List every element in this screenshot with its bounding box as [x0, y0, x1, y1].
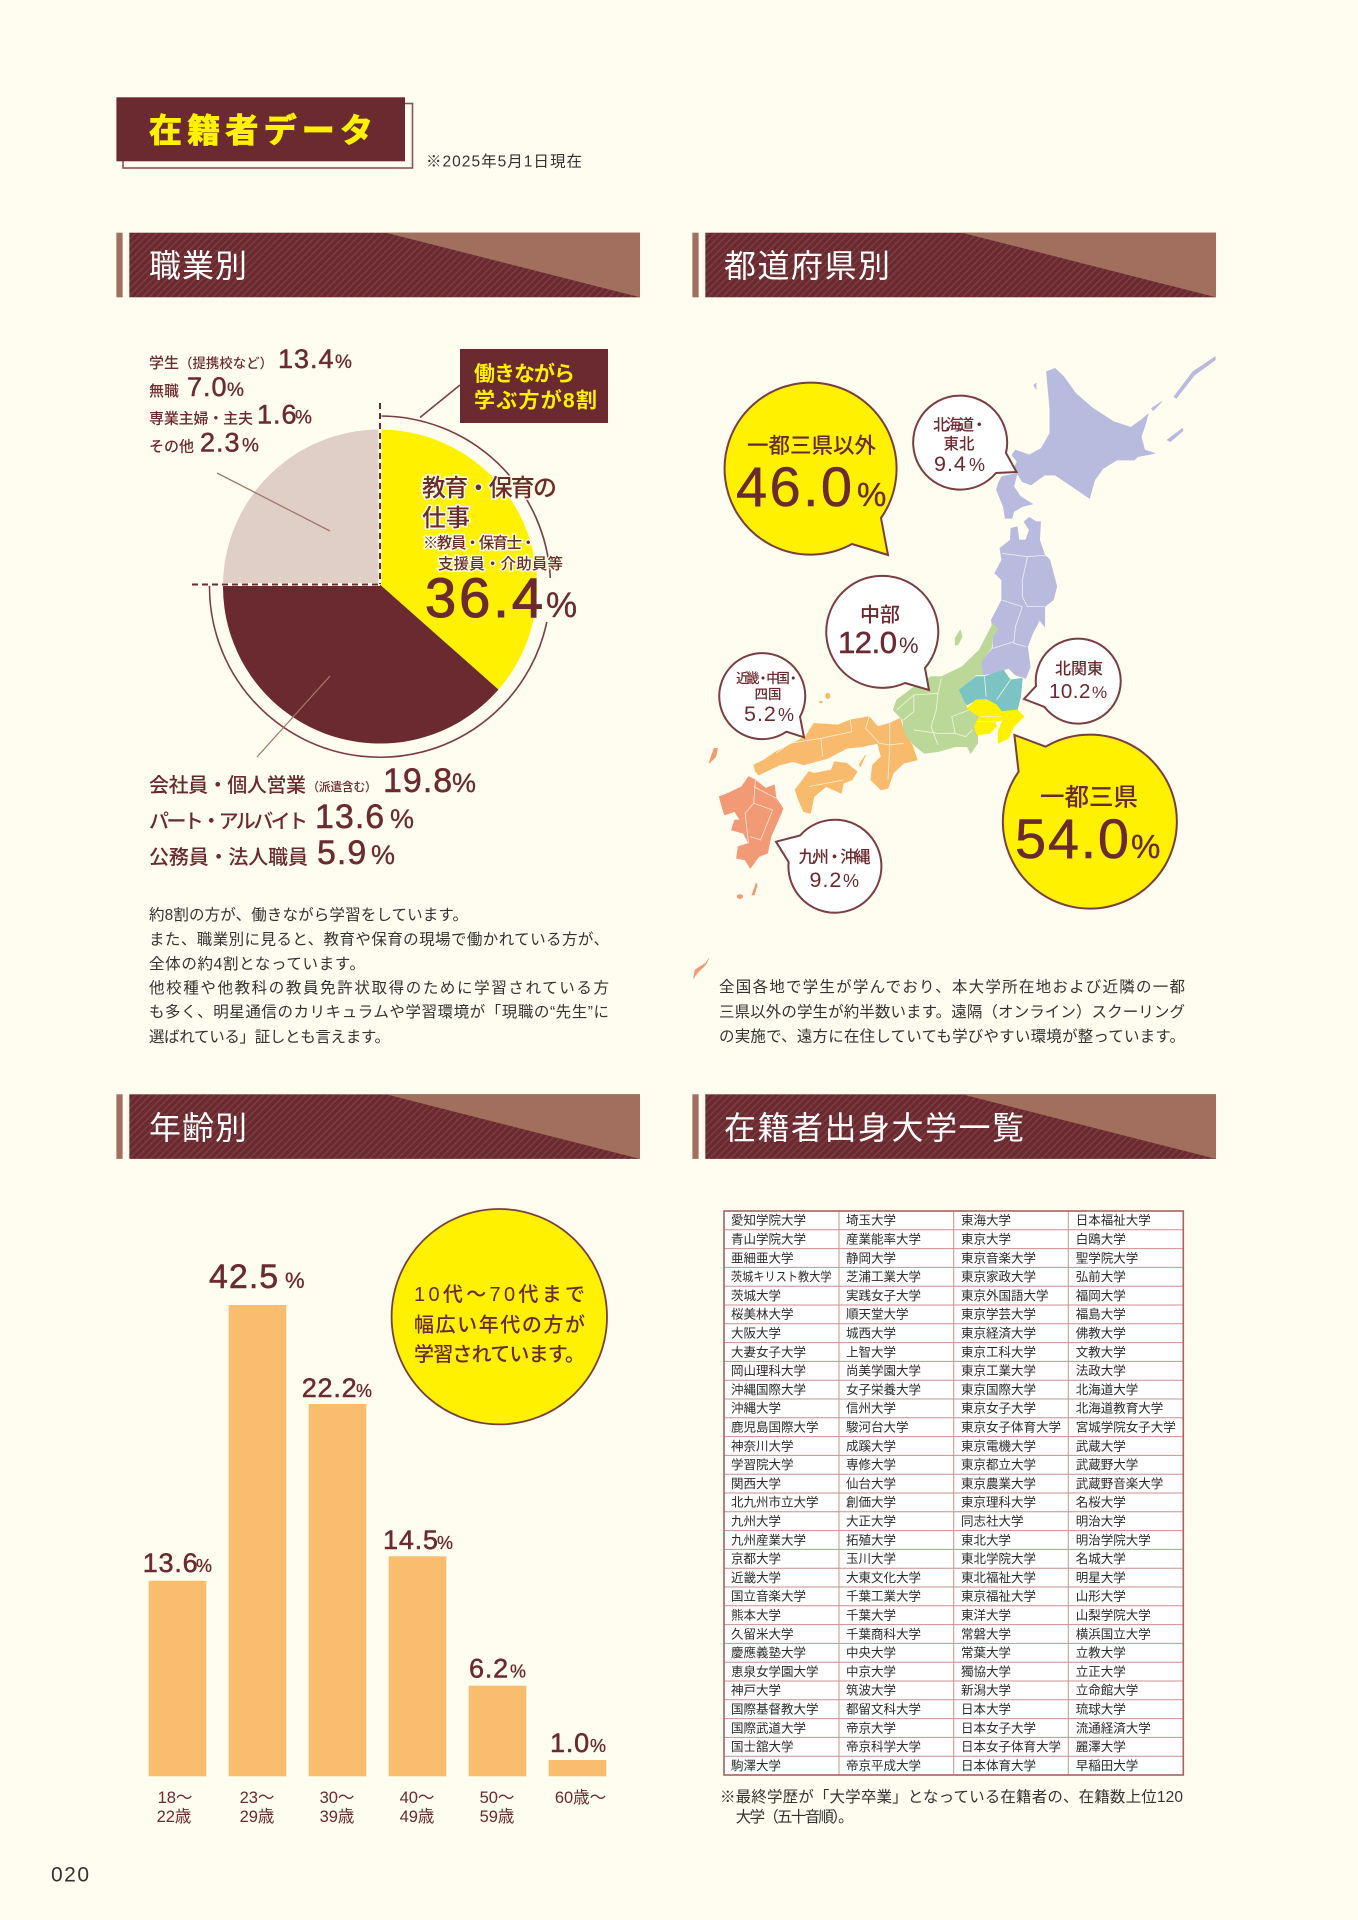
- table column 2: 都留文科大学: [846, 1701, 921, 1716]
- legend: bottom-left labels: 会社員・個人営業: [149, 774, 306, 797]
- table column 1: 国士舘大学: [731, 1739, 794, 1754]
- table column 1: 青山学院大学: [731, 1231, 806, 1246]
- legend: top-left labels: 1.6: [257, 400, 298, 430]
- bubble: 北海道・東北 9.4%: 9.4: [934, 452, 967, 476]
- bubble: 近畿・中国・四国 5.2%: 四国: [754, 687, 782, 702]
- outer arc: working students: [209, 416, 550, 757]
- table footnote: [720, 1788, 1183, 1826]
- slice: education, yellow: [380, 430, 537, 690]
- bar: 23-29 42.5%: %: [285, 1268, 305, 1293]
- section header: 職業別: [116, 233, 640, 297]
- legend: bottom-left labels: %: [371, 840, 395, 870]
- table column 4: 立命館大学: [1076, 1683, 1138, 1698]
- table column 3: 東北福祉大学: [961, 1570, 1036, 1585]
- bar: 23-29 42.5%: 42.5: [209, 1258, 279, 1296]
- bubble: 近畿・中国・四国 5.2%: 近畿・中国・: [736, 671, 800, 686]
- table column 1: 国立音楽大学: [731, 1589, 806, 1604]
- legend: top-left labels: 無職: [149, 383, 179, 400]
- bar: 40-49 14.5%: %: [437, 1533, 453, 1553]
- bar: 18-22 13.6%: 22歳: [157, 1807, 191, 1826]
- table column 2: 帝京科学大学: [846, 1739, 921, 1754]
- table column 2: 中京大学: [846, 1664, 896, 1679]
- table column 1: 沖縄大学: [731, 1401, 781, 1416]
- callout: 働きながら学ぶ方が8割: [420, 349, 608, 423]
- bubble: 北海道・東北 9.4%: 北海道・: [933, 416, 987, 434]
- table column 2: 創価大学: [846, 1495, 896, 1510]
- pie label: education 36.4%: 教育・保育の: [422, 475, 557, 502]
- table column 3: 新潟大学: [961, 1683, 1011, 1698]
- bubble: 九州・沖縄 9.2%: 9.2: [810, 868, 842, 892]
- table column 3: 日本体育大学: [961, 1758, 1036, 1773]
- legend: top-left labels: 7.0: [187, 372, 228, 402]
- legend: top-left labels: 学生（提携校など）: [149, 355, 273, 372]
- table column 3: 常磐大学: [961, 1626, 1011, 1641]
- pie label: education 36.4%: 仕事: [422, 505, 470, 532]
- table column 3: 東海大学: [961, 1213, 1011, 1228]
- table column 3: 東北大学: [961, 1532, 1011, 1547]
- bar: 40-49 14.5%: 14.5: [383, 1525, 439, 1555]
- bar: 30-39 22.2%: 30〜: [320, 1789, 354, 1807]
- table column 1: 近畿大学: [731, 1570, 781, 1585]
- table column 2: 実践女子大学: [846, 1288, 921, 1303]
- table column 2: 上智大学: [846, 1344, 896, 1359]
- text block: occupation commentary: 約8割の方が、働きながら学習をしています。: [149, 906, 468, 924]
- bubble: 一都三県以外 46.0%: 46.0: [736, 455, 852, 518]
- table column 2: 尚美学園大学: [846, 1363, 921, 1378]
- table column 3: 東京電機大学: [961, 1438, 1036, 1453]
- slice: working, dark: [223, 584, 498, 744]
- callout: 10代〜70代まで: 幅広い年代の方が: [414, 1314, 585, 1336]
- legend: bottom-left labels: 公務員・法人職員: [149, 846, 308, 869]
- table column 1: 九州産業大学: [731, 1532, 806, 1547]
- table column 1: 神奈川大学: [731, 1438, 794, 1453]
- table column 1: 茨城キリスト教大学: [731, 1269, 832, 1284]
- bubble: 中部 12.0%: %: [899, 633, 919, 658]
- pie label: education 36.4%: 36.4: [425, 566, 543, 629]
- table column 4: 武蔵野音楽大学: [1076, 1476, 1163, 1491]
- legend: bottom-left labels: 5.9: [317, 834, 367, 872]
- legend: bottom-left labels: 19.8: [383, 762, 453, 800]
- bubble: 一都三県 54.0%: %: [1131, 828, 1160, 865]
- bar: 40-49 14.5%: 49歳: [400, 1807, 434, 1826]
- table column 1: 桜美林大学: [731, 1307, 794, 1322]
- table column 4: 名城大学: [1076, 1551, 1126, 1566]
- table column 1: 国際基督教大学: [731, 1701, 819, 1716]
- table column 3: 東京女子大学: [961, 1401, 1036, 1416]
- table column 2: 信州大学: [846, 1401, 896, 1416]
- table column 1: 大妻女子大学: [731, 1344, 806, 1359]
- bubble: 一都三県 54.0%: 54.0: [1015, 807, 1129, 870]
- table column 3: 東京大学: [961, 1231, 1011, 1246]
- region: Kyushu and Okinawa: [693, 748, 783, 978]
- table grid: [724, 1211, 1183, 1775]
- table column 4: 法政大学: [1076, 1363, 1126, 1378]
- table column 4: 日本福祉大学: [1076, 1213, 1151, 1228]
- table column 2: [846, 1213, 921, 1773]
- callout: 10代〜70代まで: [392, 1209, 607, 1424]
- slice: other, light: [223, 430, 380, 584]
- text block: prefecture commentary: の実施で、遠方に在住していても学びやすい環境が整っています。: [719, 1028, 1185, 1046]
- bubble: 中部 12.0%: [826, 576, 938, 690]
- bar: 23-29 42.5%: 29歳: [240, 1807, 274, 1826]
- bar: 30-39 22.2%: [302, 1373, 372, 1826]
- table column 4: 武蔵大学: [1076, 1438, 1126, 1453]
- pie label: education 36.4%: [422, 475, 577, 629]
- table column 4: [1076, 1213, 1176, 1773]
- section header: 都道府県別: 都道府県別: [724, 248, 890, 284]
- table column 4: 名桜大学: [1076, 1495, 1126, 1510]
- bubble: 北関東 10.2%: 10.2: [1049, 680, 1091, 703]
- legend: bottom-left labels: 13.6: [315, 798, 385, 836]
- legend: bottom-left labels: %: [390, 804, 414, 834]
- table column 2: 仙台大学: [846, 1476, 896, 1491]
- table column 3: 獨協大学: [961, 1664, 1011, 1679]
- table column 4: 早稲田大学: [1076, 1758, 1138, 1773]
- bubble: 北関東 10.2%: 北関東: [1055, 660, 1103, 678]
- region: Kita-Kanto: [959, 670, 1022, 712]
- table column 3: 東京女子体育大学: [961, 1419, 1061, 1434]
- legend: top-left labels: 13.4: [278, 344, 335, 374]
- table column 1: 慶應義塾大学: [731, 1645, 806, 1660]
- table column 1: 神戸大学: [731, 1683, 781, 1698]
- bubble: 九州・沖縄 9.2%: 九州・沖縄: [798, 848, 871, 867]
- text block: occupation commentary: 選ばれている」証しとも言えます。: [149, 1028, 390, 1046]
- table column 1: 国際武道大学: [731, 1720, 806, 1735]
- title: 在籍者データ: 在籍者データ: [149, 112, 373, 149]
- table column 3: 日本女子大学: [961, 1720, 1036, 1735]
- table column 3: 東京学芸大学: [961, 1307, 1036, 1322]
- legend: top-left labels: [149, 344, 352, 458]
- callout: 10代〜70代まで: 10代〜70代まで: [414, 1283, 585, 1306]
- bubble: 北海道・東北 9.4%: [913, 396, 1016, 490]
- table column 2: 成蹊大学: [846, 1438, 896, 1453]
- bubble: 中部 12.0%: 12.0: [838, 625, 897, 660]
- table column 1: 岡山理科大学: [731, 1363, 806, 1378]
- table column 1: 熊本大学: [731, 1607, 781, 1622]
- bar: 30-39 22.2%: %: [356, 1381, 372, 1401]
- table column 2: 駿河台大学: [846, 1419, 909, 1434]
- table column 4: 北海道大学: [1076, 1382, 1138, 1397]
- legend: top-left labels: 専業主婦・主夫: [149, 410, 253, 428]
- bubble: 近畿・中国・四国 5.2%: [719, 653, 805, 739]
- bar: 18-22 13.6%: 13.6: [143, 1548, 198, 1578]
- table column 3: 東京経済大学: [961, 1325, 1036, 1340]
- bar: 50-59 6.2%: %: [510, 1662, 526, 1682]
- table column 4: 文教大学: [1076, 1344, 1126, 1359]
- table column 4: 麗澤大学: [1076, 1739, 1126, 1754]
- table column 1: 恵泉女学園大学: [731, 1664, 819, 1679]
- pie chart: occupations: [192, 403, 550, 757]
- bar: 60+ 1.0%: %: [590, 1736, 606, 1756]
- legend: bottom-left labels: %: [452, 768, 476, 798]
- table column 3: 常葉大学: [961, 1645, 1011, 1660]
- table column 2: 大東文化大学: [846, 1570, 921, 1585]
- table footnote: ※最終学歴が「大学卒業」となっている在籍者の、在籍数上位120: [720, 1788, 1183, 1806]
- legend: top-left labels: その他: [149, 438, 194, 456]
- table column 3: 東洋大学: [961, 1607, 1011, 1622]
- bubble: 一都三県以外 46.0%: 一都三県以外: [747, 434, 876, 458]
- leader lines: [217, 473, 330, 757]
- table column 3: 東京都立大学: [961, 1457, 1036, 1472]
- title: 在籍者データ: [116, 97, 413, 168]
- bar chart: age groups: [143, 1258, 606, 1826]
- pie label: education 36.4%: %: [546, 586, 577, 625]
- section header: 年齢別: [116, 1094, 640, 1159]
- table column 2: 玉川大学: [846, 1551, 896, 1566]
- table column 3: 東京福祉大学: [961, 1589, 1036, 1604]
- legend: bottom-left labels: パート・アルバイト: [149, 810, 308, 833]
- table column 3: 東京国際大学: [961, 1382, 1036, 1397]
- table column 4: 武蔵野大学: [1076, 1457, 1138, 1472]
- table column 2: 産業能率大学: [846, 1231, 921, 1246]
- legend: bottom-left labels: [149, 762, 476, 872]
- bubble: 北関東 10.2%: %: [1092, 683, 1107, 702]
- bar: 50-59 6.2%: [469, 1654, 526, 1826]
- table column 4: 宮城学院女子大学: [1076, 1419, 1176, 1434]
- table column 1: 鹿児島国際大学: [731, 1419, 819, 1434]
- bar: 40-49 14.5%: 40〜: [400, 1789, 434, 1807]
- text block: occupation commentary: 全体の約4割となっています。: [149, 955, 365, 973]
- callout: 働きながら学ぶ方が8割: 学ぶ方が8割: [474, 388, 597, 412]
- callout: 10代〜70代まで: 学習されています。: [414, 1343, 585, 1366]
- table column 4: 明星大学: [1076, 1570, 1126, 1585]
- text block: occupation commentary: [149, 906, 609, 1046]
- table column 1: [731, 1213, 832, 1773]
- table column 3: 東京理科大学: [961, 1495, 1036, 1510]
- table column 4: 山梨学院大学: [1076, 1607, 1151, 1622]
- table column 1: 駒澤大学: [731, 1758, 781, 1773]
- bubble: 近畿・中国・四国 5.2%: %: [778, 705, 794, 725]
- legend: top-left labels: %: [335, 352, 352, 373]
- bar: 18-22 13.6%: %: [196, 1556, 212, 1576]
- text block: prefecture commentary: 全国各地で学生が学んでおり、本大学所在地および近隣の一都: [719, 978, 1185, 996]
- bar: 60+ 1.0%: 60歳〜: [555, 1788, 606, 1807]
- table column 3: 東京外国語大学: [961, 1288, 1049, 1303]
- table column 2: 順天堂大学: [846, 1307, 909, 1322]
- bubble: 一都三県 54.0%: 一都三県: [1040, 784, 1138, 812]
- dashed dividers: [192, 403, 380, 584]
- table column 3: 東京農業大学: [961, 1476, 1036, 1491]
- table column 1: 沖縄国際大学: [731, 1382, 806, 1397]
- bar: 30-39 22.2%: 39歳: [320, 1807, 354, 1826]
- table column 2: 拓殖大学: [846, 1532, 896, 1547]
- table column 2: 大正大学: [846, 1513, 896, 1528]
- bubble: 一都三県 54.0%: [1003, 735, 1177, 909]
- table column 4: 明治大学: [1076, 1513, 1126, 1528]
- table column 3: 日本女子体育大学: [961, 1739, 1061, 1754]
- table column 2: 筑波大学: [846, 1683, 896, 1698]
- table column 4: 立正大学: [1076, 1664, 1126, 1679]
- table column 2: 中央大学: [846, 1645, 896, 1660]
- bubble: 北関東 10.2%: [1024, 639, 1121, 724]
- table column 2: 芝浦工業大学: [846, 1269, 921, 1284]
- table column 4: 福岡大学: [1076, 1288, 1126, 1303]
- region: Tokyo area: [967, 699, 1024, 743]
- table column 4: 佛教大学: [1076, 1325, 1126, 1340]
- table column 3: 東京工業大学: [961, 1363, 1036, 1378]
- table column 4: 流通経済大学: [1076, 1720, 1151, 1735]
- bar: 30-39 22.2%: 22.2: [302, 1373, 357, 1403]
- table column 3: 東京家政大学: [961, 1269, 1036, 1284]
- bubble: 北海道・東北 9.4%: 東北: [943, 435, 975, 453]
- table column 1: 久留米大学: [731, 1626, 794, 1641]
- table column 4: 白鴎大学: [1076, 1231, 1126, 1246]
- table column 4: 立教大学: [1076, 1645, 1126, 1660]
- bar: 50-59 6.2%: 59歳: [480, 1807, 514, 1826]
- section header: 在籍者出身大学一覧: [692, 1094, 1216, 1159]
- table column 3: 東京工科大学: [961, 1344, 1036, 1359]
- table column 2: 城西大学: [846, 1325, 896, 1340]
- table column 4: 福島大学: [1076, 1307, 1126, 1322]
- date note: ※2025年5月1日現在: [426, 152, 582, 170]
- section header: 年齢別: 年齢別: [149, 1110, 247, 1146]
- table column 1: 大阪大学: [731, 1325, 781, 1340]
- table column 3: 東京音楽大学: [961, 1250, 1036, 1265]
- section header: 都道府県別: [692, 233, 1216, 297]
- bar: 50-59 6.2%: 6.2: [469, 1654, 509, 1684]
- table column 2: 静岡大学: [846, 1250, 896, 1265]
- table column 2: 専修大学: [846, 1457, 896, 1472]
- table column 1: 亜細亜大学: [731, 1250, 794, 1265]
- bubble: 一都三県以外 46.0%: %: [857, 476, 886, 513]
- bar: 23-29 42.5%: 23〜: [240, 1789, 274, 1807]
- region: Chubu: [893, 623, 998, 753]
- legend: top-left labels: 2.3: [200, 428, 241, 458]
- table column 4: 聖学院大学: [1076, 1250, 1138, 1265]
- table column 4: 明治学院大学: [1076, 1532, 1151, 1547]
- table column 4: 山形大学: [1076, 1589, 1126, 1604]
- table column 2: 埼玉大学: [846, 1213, 896, 1228]
- legend: top-left labels: %: [295, 408, 312, 428]
- table column 4: 弘前大学: [1076, 1269, 1126, 1284]
- table column 4: 琉球大学: [1076, 1701, 1126, 1716]
- bubble: 一都三県以外 46.0%: [725, 383, 897, 555]
- pie label: education 36.4%: ※教員・保育士・: [423, 534, 536, 552]
- bar: 50-59 6.2%: 50〜: [480, 1789, 514, 1807]
- table column 2: 千葉工業大学: [846, 1589, 921, 1604]
- table column 1: 北九州市立大学: [731, 1495, 819, 1510]
- region: Kinki, Chugoku, Shikoku: [754, 693, 917, 813]
- table column 4: 横浜国立大学: [1076, 1626, 1151, 1641]
- table column 3: 日本大学: [961, 1701, 1011, 1716]
- table column 1: 茨城大学: [731, 1288, 781, 1303]
- table column 2: 帝京大学: [846, 1720, 896, 1735]
- bubble: 北海道・東北 9.4%: %: [969, 455, 985, 475]
- table column 2: 千葉大学: [846, 1607, 896, 1622]
- bubble: 九州・沖縄 9.2%: %: [843, 871, 859, 891]
- table column 1: 京都大学: [731, 1551, 781, 1566]
- table column 2: 女子栄養大学: [846, 1382, 921, 1397]
- bubble: 中部 12.0%: 中部: [860, 604, 900, 627]
- table column 1: 学習院大学: [731, 1457, 794, 1472]
- table column 1: 関西大学: [731, 1476, 781, 1491]
- text block: prefecture commentary: 三県以外の学生が約半数います。遠隔（オンライン）スクーリング: [719, 1003, 1185, 1021]
- bubble: 近畿・中国・四国 5.2%: 5.2: [744, 702, 777, 726]
- table column 2: 帝京平成大学: [846, 1758, 921, 1773]
- bar: 60+ 1.0%: [549, 1728, 606, 1807]
- callout: 働きながら学ぶ方が8割: 働きながら: [474, 362, 575, 386]
- table column 3: 同志社大学: [961, 1513, 1024, 1528]
- map of Japan: [693, 357, 1215, 978]
- page number: 020: [51, 1864, 91, 1886]
- region: Hokkaido and Tohoku: [981, 357, 1215, 678]
- table column 3: [961, 1213, 1061, 1773]
- table column 1: 愛知学院大学: [731, 1213, 806, 1228]
- table column 2: 千葉商科大学: [846, 1626, 921, 1641]
- section header: 職業別: 職業別: [149, 248, 247, 284]
- table column 1: 九州大学: [731, 1513, 781, 1528]
- bar: 18-22 13.6%: 18〜: [158, 1789, 192, 1807]
- bar: 60+ 1.0%: 1.0: [550, 1728, 590, 1758]
- text block: occupation commentary: も多く、明星通信のカリキュラムや学習環境が「現職の“先生”に: [149, 1003, 609, 1021]
- university table: [724, 1211, 1183, 1775]
- text block: prefecture commentary: [719, 978, 1185, 1046]
- bar: 40-49 14.5%: [383, 1525, 453, 1826]
- bar: 23-29 42.5%: [209, 1258, 305, 1826]
- bar: 18-22 13.6%: [143, 1548, 212, 1826]
- legend: bottom-left labels: （派遣含む）: [307, 779, 377, 794]
- table column 3: 東北学院大学: [961, 1551, 1036, 1566]
- table footnote: 大学（五十音順）。: [736, 1808, 854, 1826]
- table column 4: 北海道教育大学: [1076, 1401, 1163, 1416]
- bubble: 九州・沖縄 9.2%: [776, 820, 881, 913]
- text block: occupation commentary: また、職業別に見ると、教育や保育の現場で働かれている方が、: [149, 930, 609, 948]
- text block: occupation commentary: 他校種や他教科の教員免許状取得のために学習されている方: [149, 979, 609, 997]
- legend: top-left labels: %: [242, 436, 259, 456]
- section header: 在籍者出身大学一覧: 在籍者出身大学一覧: [724, 1110, 1024, 1146]
- legend: top-left labels: %: [227, 380, 244, 401]
- pie label: education 36.4%: 支援員・介助員等: [438, 555, 563, 573]
